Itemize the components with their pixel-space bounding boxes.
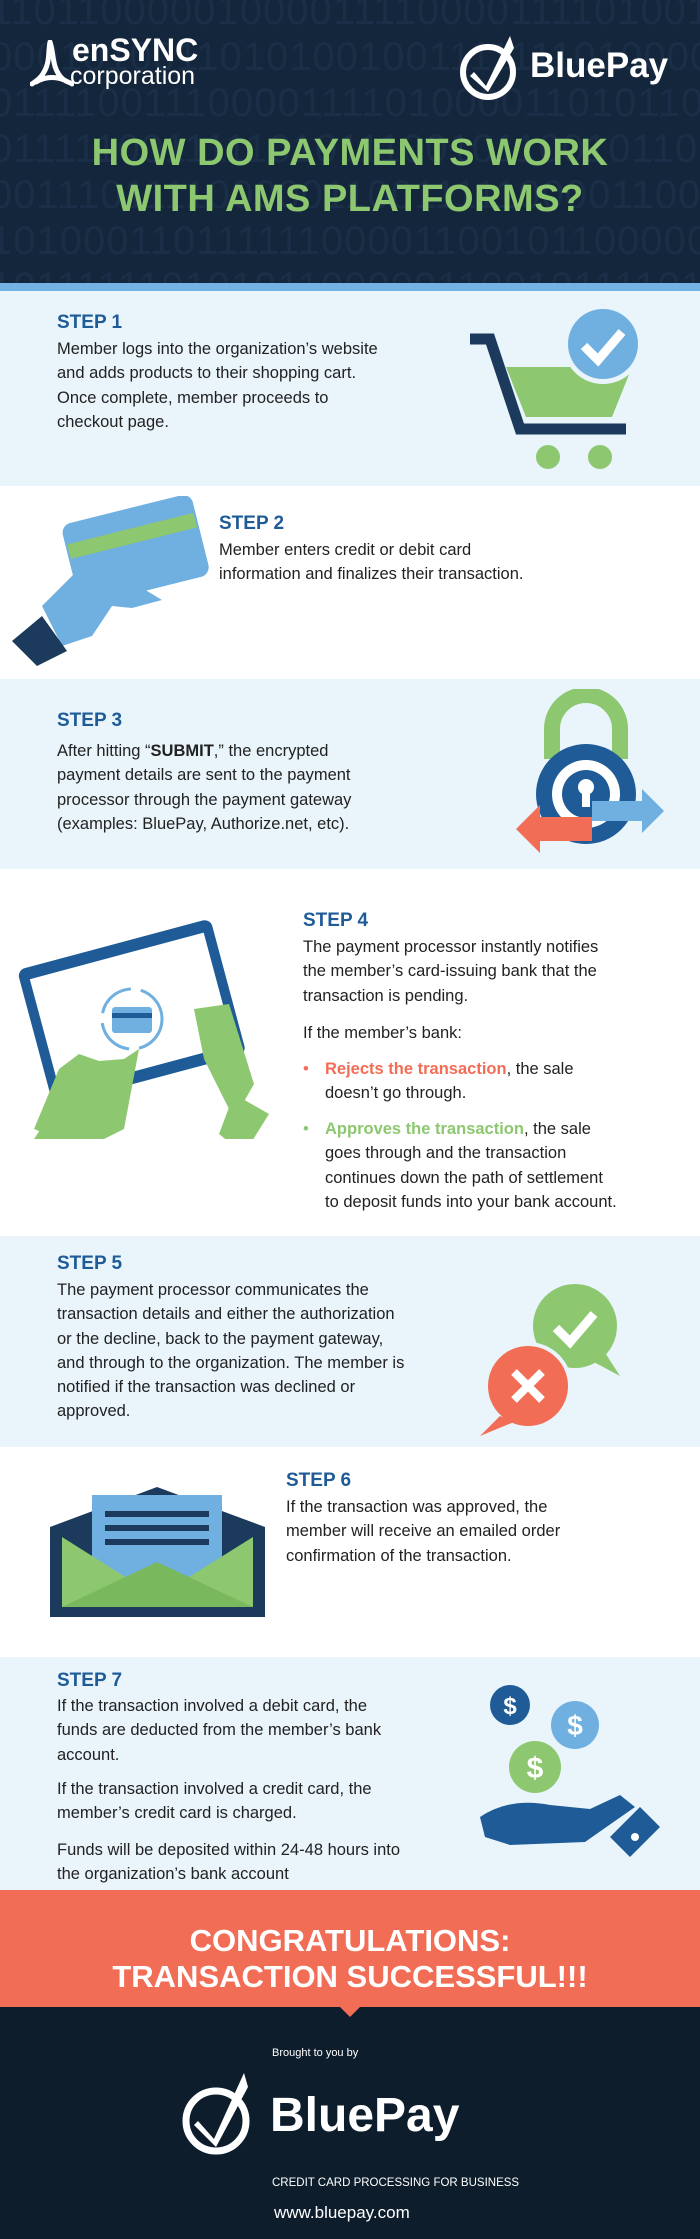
bullet: approves: to deposit funds into your bank account. xyxy=(325,1193,617,1211)
panel: step 2: STEP 2 xyxy=(219,513,284,534)
panel: step 4: If the member’s bank: xyxy=(303,1024,462,1042)
footer: BluePay xyxy=(270,2089,459,2142)
panel: step 1 xyxy=(0,291,700,486)
panel: step 6: confirmation of the transaction. xyxy=(286,1547,512,1565)
panel: step 3: payment details are sent to the payment xyxy=(57,766,351,784)
logo: BluePay footer xyxy=(182,2073,250,2154)
panel: step 3: STEP 3 xyxy=(57,710,122,731)
panel: step 5: The payment processor communicates the xyxy=(57,1281,369,1299)
footer: Brought to you by xyxy=(272,2047,358,2059)
logo: BluePay xyxy=(460,36,668,100)
panel: step 3: After hitting “SUBMIT,” the encrypted xyxy=(57,742,328,760)
panel: step 3: (examples: BluePay, Authorize.net, etc). xyxy=(57,815,349,833)
title: WITH AMS PLATFORMS? xyxy=(116,178,584,220)
icon: padlock with arrows xyxy=(516,689,664,853)
panel: step 7 xyxy=(0,1657,700,1890)
bullet: approves: • xyxy=(303,1120,309,1138)
bullet: rejects xyxy=(303,1060,574,1102)
panel: step 7: STEP 7 xyxy=(57,1670,122,1691)
footer: CREDIT CARD PROCESSING FOR BUSINESS xyxy=(272,2177,519,2189)
icon: hand with coins: $ xyxy=(527,1752,544,1785)
bullet: approves: Approves the transaction, the sale xyxy=(325,1120,591,1138)
bullet: rejects: doesn’t go through. xyxy=(325,1084,466,1102)
footer: www.bluepay.com xyxy=(274,2203,410,2222)
bullet: rejects: Rejects the transaction, the sale xyxy=(325,1060,574,1078)
title: HOW DO PAYMENTS WORK xyxy=(92,132,608,174)
panel: step 6: member will receive an emailed order xyxy=(286,1522,560,1540)
panel: step 5: and through to the organization. The member is xyxy=(57,1354,404,1372)
icon: envelope xyxy=(50,1487,265,1617)
panel: step 6 xyxy=(50,1470,560,1617)
panel: step 7: Funds will be deposited within 24-48 hours into xyxy=(57,1841,400,1859)
bullet: approves: goes through and the transaction xyxy=(325,1144,566,1162)
panel: step 1: Member logs into the organization’s website xyxy=(57,340,378,358)
panel: step 2: Member enters credit or debit card xyxy=(219,541,471,559)
panel: step 4 xyxy=(18,910,617,1211)
header xyxy=(0,0,700,284)
panel: step 7: the organization’s bank account xyxy=(57,1865,289,1883)
panel: step 1: STEP 1 xyxy=(57,312,122,333)
icon: hand with coins: $ xyxy=(567,1710,583,1741)
panel: step 7: If the transaction involved a credit card, the xyxy=(57,1780,372,1798)
bullet: approves: continues down the path of settlement xyxy=(325,1169,603,1187)
bullet: rejects: • xyxy=(303,1060,309,1078)
icon: hand with card xyxy=(12,496,209,666)
panel: step 7: member’s credit card is charged. xyxy=(57,1804,297,1822)
panel: step 6: STEP 6 xyxy=(286,1470,351,1491)
footer xyxy=(0,2007,700,2239)
logo: enSYNC: corporation xyxy=(70,62,195,90)
banner: congratulations xyxy=(0,1890,700,2007)
icon: tablet with hands xyxy=(18,920,269,1139)
panel: step 4: the member’s card-issuing bank that the xyxy=(303,962,597,980)
panel: step 1: checkout page. xyxy=(57,413,169,431)
panel: step 7: If the transaction involved a debit card, the xyxy=(57,1697,367,1715)
title xyxy=(92,132,608,220)
icon: hand with coins xyxy=(480,1685,660,1857)
panel: step 2 xyxy=(12,496,524,666)
panel: step 5: notified if the transaction was declined or xyxy=(57,1378,355,1396)
panel: step 4: STEP 4 xyxy=(303,910,368,931)
panel: step 5: approved. xyxy=(57,1402,130,1420)
panel: step 7: account. xyxy=(57,1746,119,1764)
panel: step 1: and adds products to their shopping cart. xyxy=(57,364,356,382)
logo: enSYNC xyxy=(30,32,198,90)
panel: step 5: or the decline, back to the payment gateway, xyxy=(57,1330,383,1348)
icon: hand with coins: $ xyxy=(503,1693,517,1720)
bullet: approves xyxy=(303,1120,617,1211)
logo: enSYNC: enSYNC xyxy=(72,32,198,68)
icon: shopping cart xyxy=(470,309,638,469)
panel: step 3: processor through the payment gateway xyxy=(57,791,351,809)
panel: step 5 xyxy=(0,1236,700,1447)
panel: step 6: If the transaction was approved, the xyxy=(286,1498,547,1516)
banner: congratulations: CONGRATULATIONS: xyxy=(190,1923,510,1958)
panel: step 4: The payment processor instantly notifies xyxy=(303,938,598,956)
logo: BluePay: BluePay xyxy=(530,46,668,85)
panel: step 2: information and finalizes their transaction. xyxy=(219,565,524,583)
icon: speech bubbles check and x xyxy=(480,1284,620,1436)
panel: step 5: STEP 5 xyxy=(57,1253,122,1274)
panel: step 7: funds are deducted from the member’s bank xyxy=(57,1721,381,1739)
banner: congratulations: TRANSACTION SUCCESSFUL!!! xyxy=(112,1959,588,1994)
panel: step 4: transaction is pending. xyxy=(303,987,468,1005)
panel: step 5: transaction details and either the authorization xyxy=(57,1305,395,1323)
panel: step 1: Once complete, member proceeds to xyxy=(57,389,328,407)
panel: step 3 xyxy=(0,679,700,869)
